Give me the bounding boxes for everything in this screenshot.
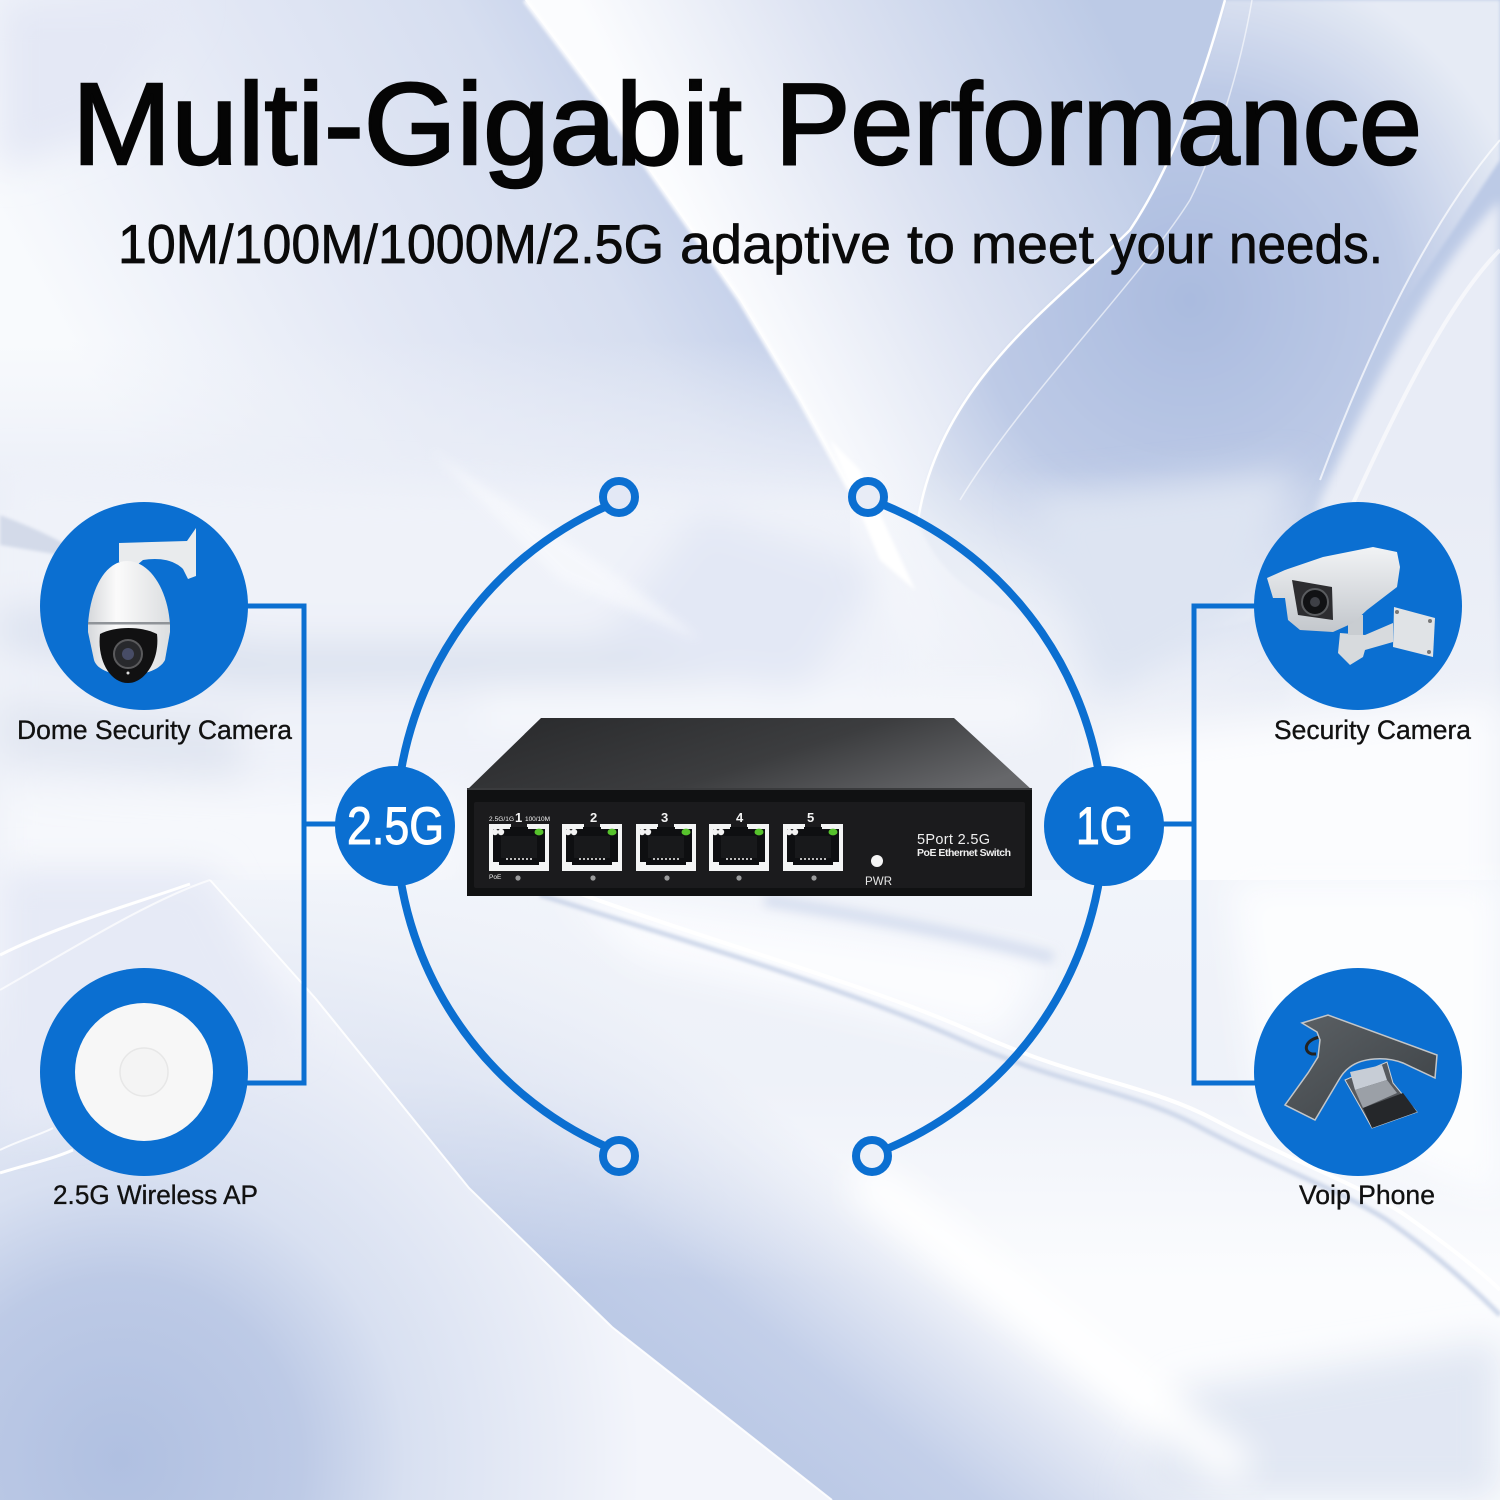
title: Multi-Gigabit	[72, 59, 742, 189]
device: 2.5G wireless AP	[40, 968, 248, 1176]
speaker body	[1285, 1015, 1437, 1120]
left arc	[396, 506, 607, 1147]
left connector lines	[240, 606, 340, 1083]
product: 5-port PoE switch	[467, 718, 1032, 896]
switch front face	[467, 788, 1032, 896]
port 1	[489, 824, 549, 871]
port labels: 5	[807, 810, 814, 825]
deep blue fold	[918, 0, 1500, 635]
cord	[1306, 1037, 1320, 1054]
keypad	[1363, 1093, 1417, 1128]
title: Performance	[775, 59, 1422, 189]
port labels: 2.5G/1G	[489, 816, 514, 823]
title	[72, 59, 1422, 189]
top right drape	[525, 0, 1500, 730]
port labels: 100/10M	[525, 816, 550, 823]
lens	[1302, 589, 1328, 615]
port labels: 4	[736, 810, 744, 825]
subtitle: to	[907, 213, 955, 275]
label: dome security camera: Dome Security Camera	[17, 715, 293, 745]
arm and swivel	[1338, 623, 1393, 665]
badge: 2.5G	[335, 766, 455, 886]
mid band and soft streaks	[0, 0, 1500, 1100]
port 4	[709, 824, 769, 871]
switch top face	[467, 718, 1032, 790]
device: VoIP conference phone	[1254, 968, 1462, 1176]
subtitle: meet	[971, 213, 1094, 275]
wall bracket	[119, 528, 196, 579]
dome body	[88, 561, 170, 675]
port labels	[489, 810, 814, 881]
bright diagonal band	[860, 1176, 1244, 1473]
subtitle	[118, 213, 1383, 275]
subtitle: your	[1110, 213, 1213, 275]
screen	[1350, 1065, 1387, 1090]
subtitle: adaptive	[680, 213, 891, 275]
right connector lines	[1160, 606, 1260, 1083]
camera housing	[1267, 547, 1400, 632]
arc end node: top left	[603, 481, 635, 513]
port labels: 2	[590, 810, 597, 825]
lens	[114, 640, 142, 668]
subtitle: 10M/100M/1000M/2.5G	[118, 213, 664, 275]
center button	[120, 1048, 168, 1096]
badge: 1G: 1G	[1076, 797, 1133, 856]
label: security camera: Security Camera	[1274, 715, 1472, 745]
product name: PoE Ethernet Switch	[917, 847, 1011, 859]
black lens housing	[100, 628, 157, 683]
product name: 5Port 2.5G	[917, 832, 990, 848]
bottom centre drape	[210, 880, 1500, 1500]
upper fade of the bottom centre drape	[210, 880, 1500, 1280]
badge: 2.5G: 2.5G	[347, 797, 444, 856]
arc end node: bottom right	[856, 1140, 888, 1172]
port labels: 3	[661, 810, 668, 825]
wall plate	[1393, 607, 1435, 657]
phone base	[1345, 1062, 1417, 1128]
device: security camera	[1254, 502, 1462, 710]
arc end node: bottom left	[603, 1140, 635, 1172]
silver control band	[1355, 1080, 1397, 1108]
switch front recess panel	[474, 802, 1025, 888]
right arc	[884, 505, 1104, 1148]
port status LEDs	[515, 875, 817, 881]
port labels: PoE	[489, 874, 502, 881]
top left drape	[0, 0, 850, 510]
port labels: 1	[515, 810, 522, 825]
port 3	[636, 824, 696, 871]
badge: 1G	[1044, 766, 1164, 886]
pale fold at right	[1280, 200, 1500, 730]
lower fade of the top drapes (right)	[845, 470, 1500, 730]
label: 2.5G wireless AP: 2.5G Wireless AP	[53, 1180, 258, 1210]
product name	[917, 832, 1011, 859]
device: dome security camera	[40, 502, 248, 710]
label: VoIP phone: Voip Phone	[1299, 1180, 1435, 1210]
subtitle: needs.	[1229, 213, 1383, 275]
lower fade of the top drapes (left)	[0, 340, 850, 510]
power LED and label	[865, 855, 892, 888]
power LED and label: PWR	[865, 876, 892, 888]
arc end node: top right	[852, 481, 884, 513]
port 2	[562, 824, 622, 871]
bottom left drape	[0, 880, 832, 1500]
white AP disc	[75, 1003, 213, 1141]
port 5	[783, 824, 843, 871]
camera face with IR ring	[1292, 580, 1333, 620]
